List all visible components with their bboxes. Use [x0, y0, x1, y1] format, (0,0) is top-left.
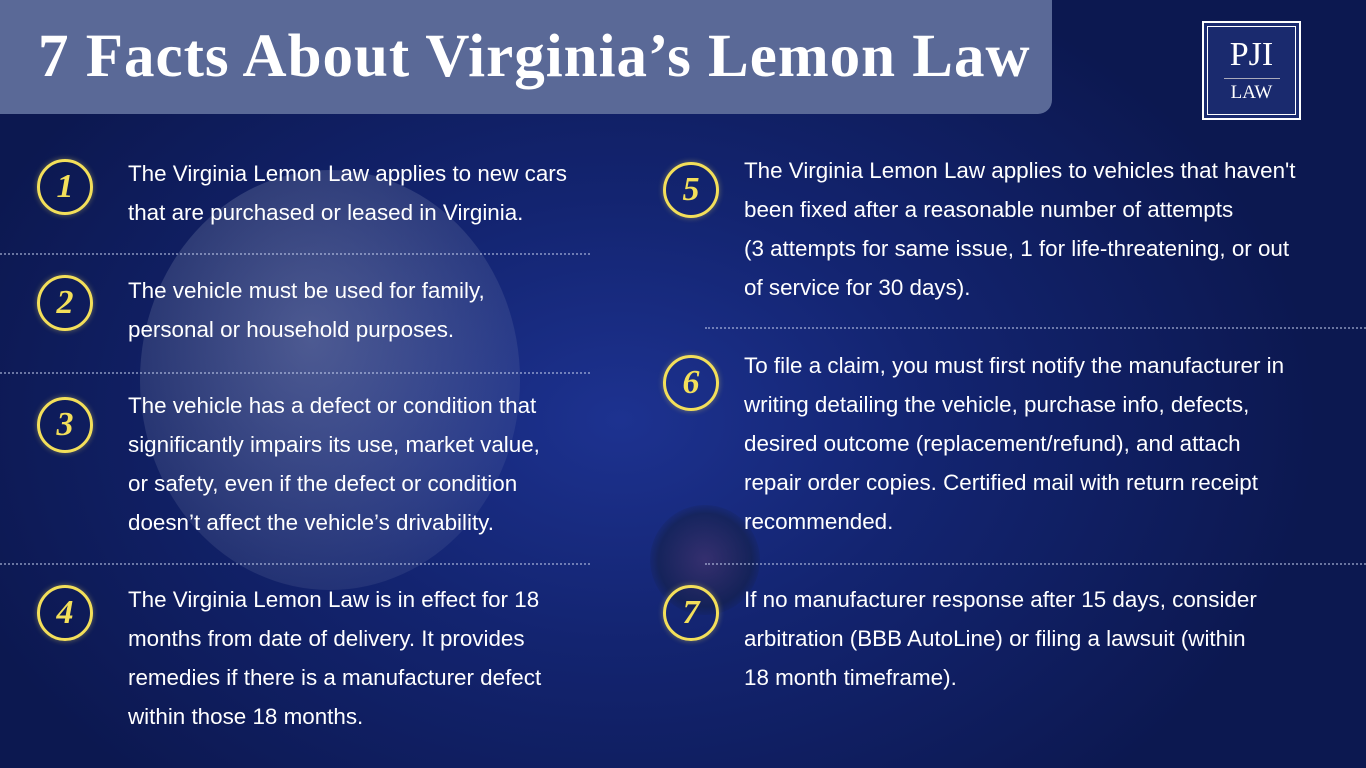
text: The vehicle must be used for family,	[128, 278, 485, 303]
fact 1	[34, 156, 567, 225]
text: significantly impairs its use, market value,	[128, 432, 540, 457]
fact 4	[34, 582, 542, 729]
decorative lemon blob	[140, 170, 520, 590]
text: 6	[682, 364, 700, 401]
title bar	[0, 0, 1052, 114]
fact 5	[660, 158, 1296, 300]
decorative wheels	[650, 505, 760, 615]
text: of service for 30 days).	[744, 275, 970, 300]
fact 6	[660, 352, 1284, 534]
logo: PJI	[1230, 36, 1273, 73]
text: 4	[56, 594, 74, 631]
logo: LAW	[1231, 82, 1272, 103]
text: The Virginia Lemon Law is in effect for 18	[128, 587, 539, 612]
text: that are purchased or leased in Virginia.	[128, 200, 523, 225]
fact 3	[34, 393, 540, 535]
text: remedies if there is a manufacturer defect	[128, 665, 541, 690]
text: repair order copies. Certified mail with return receipt	[744, 470, 1258, 495]
text: been fixed after a reasonable number of attempts	[744, 197, 1233, 222]
text: 3	[56, 406, 74, 443]
text: To file a claim, you must first notify the manufacturer in	[744, 353, 1284, 378]
text: doesn’t affect the vehicle’s drivability.	[128, 510, 494, 535]
text: writing detailing the vehicle, purchase info, defects,	[744, 392, 1249, 417]
text: personal or household purposes.	[128, 317, 454, 342]
logo	[1202, 21, 1301, 120]
title: 7 Facts About Virginia’s Lemon Law	[38, 23, 1031, 90]
text: (3 attempts for same issue, 1 for life-threatening, or out	[744, 236, 1289, 261]
text: 2	[56, 284, 74, 321]
text: recommended.	[744, 509, 893, 534]
text: months from date of delivery. It provides	[128, 626, 525, 651]
text: arbitration (BBB AutoLine) or filing a lawsuit (within	[744, 626, 1246, 651]
text: or safety, even if the defect or condition	[128, 471, 517, 496]
text: 7	[682, 594, 700, 631]
fact 7	[660, 582, 1257, 690]
text: 5	[682, 171, 700, 208]
text: The Virginia Lemon Law applies to new cars	[128, 161, 567, 186]
fact 2	[34, 272, 485, 342]
text: 1	[56, 168, 74, 205]
text: The vehicle has a defect or condition that	[128, 393, 536, 418]
text: The Virginia Lemon Law applies to vehicles that haven't	[744, 158, 1296, 183]
text: desired outcome (replacement/refund), and attach	[744, 431, 1241, 456]
text: within those 18 months.	[128, 704, 363, 729]
text: 18 month timeframe).	[744, 665, 957, 690]
text: If no manufacturer response after 15 days, consider	[744, 587, 1257, 612]
